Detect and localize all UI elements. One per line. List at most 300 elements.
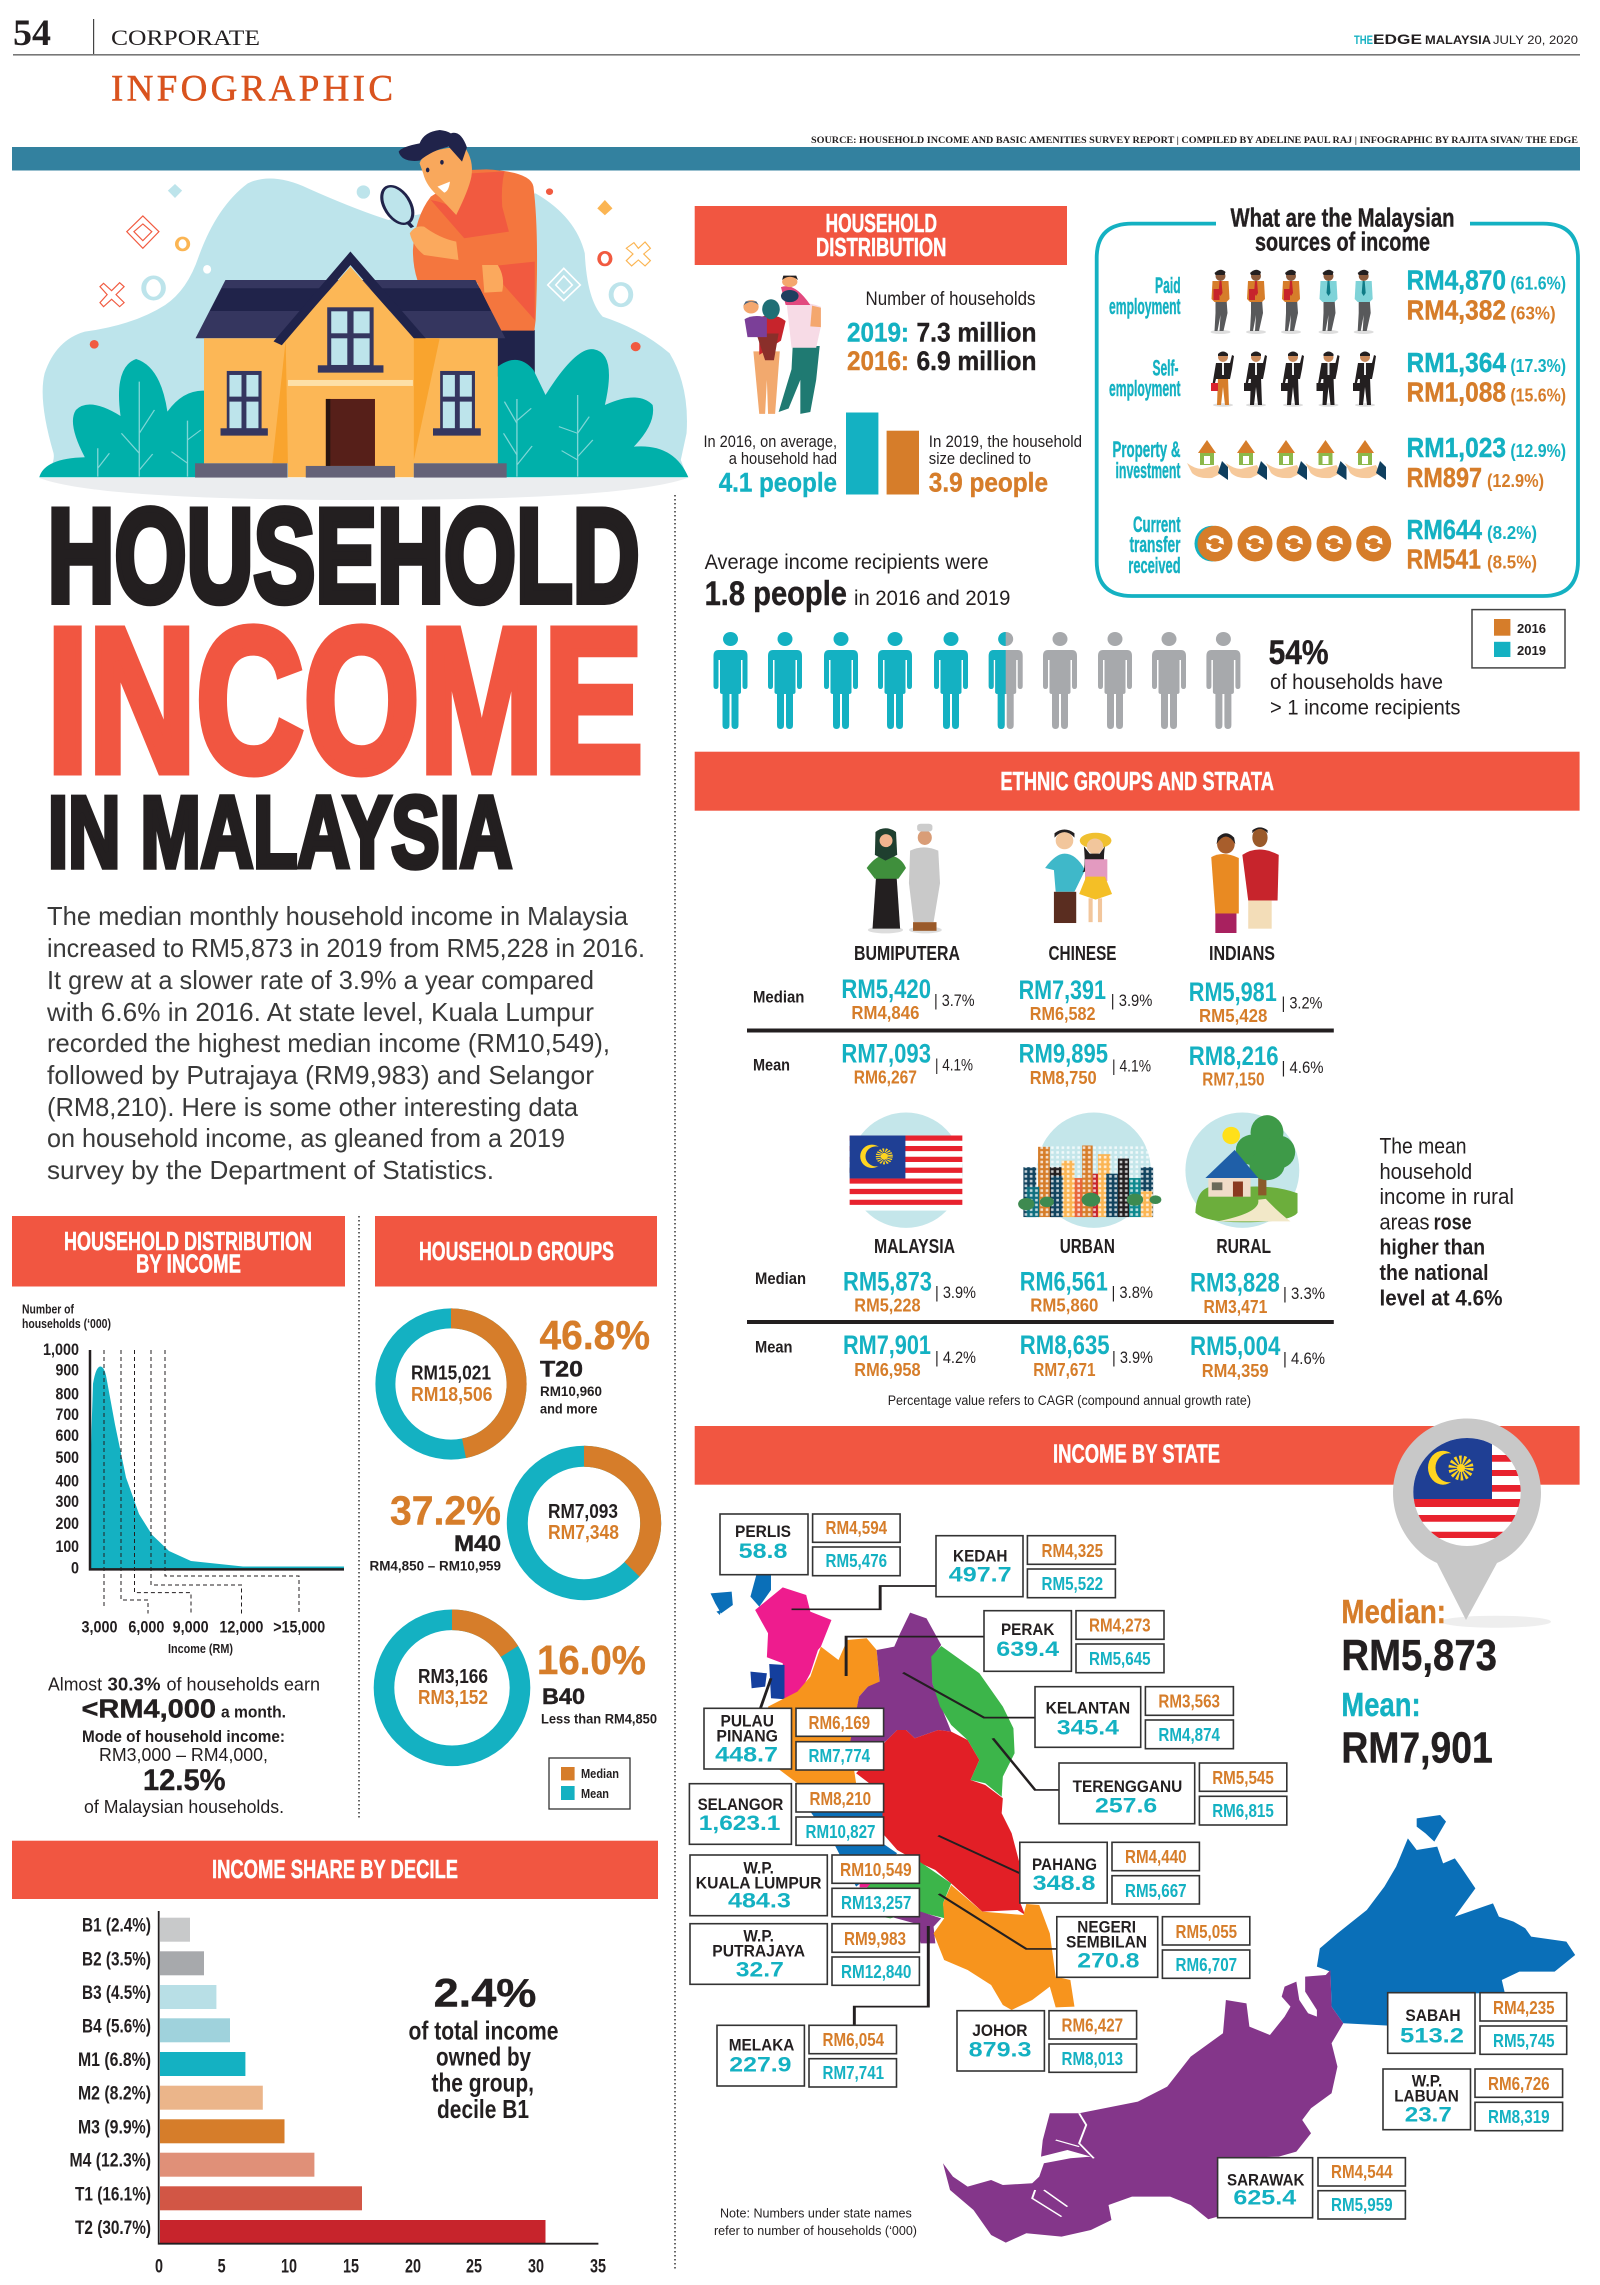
heading: INCOME BY STATE: [1053, 1439, 1220, 1469]
donut: M40: RM7,093: [548, 1501, 618, 1523]
ethnic table: | 4.1%: [935, 1055, 973, 1074]
state: Kelantan: KELANTAN: [1046, 1699, 1130, 1717]
callout text: [48, 1675, 320, 1817]
state: Melaka: 227.9: [729, 2054, 792, 2077]
donut: M40: M40: [454, 1531, 501, 1556]
donut: T20: T20: [540, 1356, 583, 1381]
state: W.P. Labuan: W.P.: [1412, 2073, 1442, 2091]
ethnic table: RM6,267: [854, 1068, 917, 1088]
bar chart: B2 (3.5%): [82, 1949, 151, 1970]
household size comparison: size declined to: [929, 449, 1031, 468]
ethnic table: | 3.2%: [1282, 993, 1322, 1012]
row: current transfer received: transfer: [1130, 532, 1181, 557]
ethnic table: RM5,428: [1199, 1006, 1267, 1026]
row: self-employment: [1109, 347, 1566, 407]
heading: ETHNIC GROUPS AND STRATA: [1000, 766, 1274, 796]
strata table: | 3.3%: [1283, 1284, 1325, 1303]
state: Johor: RM6,427: [1062, 2016, 1123, 2036]
ethnic table: RM7,150: [1202, 1070, 1264, 1090]
state: Selangor: [689, 1784, 884, 1845]
callout text: Mode of household income:: [82, 1727, 285, 1746]
distribution area chart: 900: [56, 1362, 79, 1380]
row: property and investment: RM1,023: [1406, 432, 1506, 463]
masthead: THE: [1354, 33, 1373, 47]
side note: higher than: [1380, 1235, 1485, 1260]
side note: rose: [1434, 1210, 1472, 1235]
state: Sabah: RM5,745: [1493, 2031, 1555, 2051]
donut: B40: B40: [542, 1684, 585, 1709]
bar chart: 15: [343, 2257, 359, 2278]
ethnic labels: CHINESE: [1048, 943, 1116, 965]
strata labels: MALAYSIA: [874, 1236, 955, 1258]
illustration: man inspecting house: [39, 130, 688, 500]
masthead: [1354, 32, 1578, 47]
state: Perlis: RM5,476: [826, 1551, 887, 1571]
number of households: 7.3 million: [916, 317, 1036, 347]
household size comparison: In 2016, on average,: [704, 432, 837, 451]
callout 2.4%: the group,: [432, 2068, 534, 2098]
state: Pulau Pinang: PINANG: [716, 1728, 778, 1746]
row: paid employment: employment: [1109, 294, 1181, 319]
state: Pahang: PAHANG: [1032, 1856, 1097, 1874]
legend: [1472, 610, 1565, 668]
intro paragraph: recorded the highest median income (RM10,549),: [47, 1028, 610, 1058]
ethnic labels: INDIANS: [1209, 943, 1275, 965]
callout text: of households earn: [166, 1675, 320, 1695]
national summary: Mean:: [1341, 1686, 1421, 1723]
state: W.P. Kuala Lumpur: [690, 1855, 919, 1917]
national summary: RM7,901: [1341, 1724, 1493, 1773]
intro paragraph: increased to RM5,873 in 2019 from RM5,228 in 2016.: [47, 933, 645, 963]
map note: [714, 2206, 917, 2238]
heading: [695, 752, 1580, 811]
panel: ethnic groups and strata: [695, 752, 1580, 1408]
ethnic table: | 4.6%: [1282, 1058, 1324, 1077]
distribution area chart: [43, 1341, 344, 1656]
callout 2.4%: decile B1: [437, 2094, 529, 2124]
ethnic table: Mean: [753, 1055, 790, 1074]
state: Pahang: 348.8: [1033, 1872, 1096, 1895]
heading: [12, 1216, 345, 1286]
strata table: | 4.2%: [935, 1348, 976, 1367]
pictogram: people row: [714, 632, 1240, 729]
row: property and investment: (12.9%): [1510, 441, 1566, 461]
panel: household distribution by income: [12, 1216, 345, 1817]
ethnic labels: [854, 943, 1275, 965]
state: Terengganu: RM5,545: [1212, 1768, 1274, 1788]
bar chart: [70, 1911, 606, 2278]
intro paragraph: The median monthly household income in Malaysia: [47, 901, 629, 931]
state: Sabah: [1388, 1993, 1567, 2054]
state: Terengganu: RM6,815: [1212, 1801, 1274, 1821]
section label infographic: INFOGRAPHIC: [111, 69, 393, 110]
map: Sabah and Sarawak: [943, 1815, 1575, 2243]
state: Sabah: SABAH: [1405, 2007, 1461, 2025]
state: W.P. Putrajaya: RM9,983: [844, 1929, 906, 1949]
donut: T20: RM10,960: [540, 1384, 602, 1399]
state: W.P. Putrajaya: PUTRAJAYA: [712, 1943, 805, 1961]
donut: B40: 16.0%: [537, 1637, 646, 1683]
donut: M40: RM4,850 – RM10,959: [370, 1559, 501, 1574]
row: self-employment: employment: [1109, 376, 1181, 401]
state: Pulau Pinang: 448.7: [715, 1744, 778, 1767]
distribution area chart: 400: [56, 1472, 79, 1490]
state: Perak: [984, 1611, 1164, 1673]
bar chart: 30: [528, 2257, 544, 2278]
strata table: RM5,228: [854, 1296, 921, 1316]
bar chart: 25: [466, 2257, 482, 2278]
distribution area chart: 600: [56, 1427, 79, 1445]
panel: household groups: [370, 1216, 657, 1809]
callout text: a month.: [221, 1703, 286, 1722]
section name: CORPORATE: [111, 25, 260, 50]
heading: [695, 1426, 1580, 1485]
axis title: [22, 1302, 111, 1331]
row: paid employment: RM4,870: [1406, 265, 1506, 296]
side note: the national: [1380, 1260, 1488, 1285]
state: Negeri Sembilan: RM6,707: [1176, 1955, 1237, 1975]
ethnic table: RM7,093: [841, 1039, 931, 1069]
donut: B40: [384, 1620, 657, 1756]
panel: sources of income: [1097, 202, 1578, 596]
title line 2: INCOME: [47, 586, 643, 815]
state: Johor: 879.3: [969, 2039, 1032, 2062]
legend: 2019: [1517, 643, 1546, 658]
strata table: | 4.6%: [1283, 1349, 1325, 1368]
state: Negeri Sembilan: NEGERI: [1077, 1919, 1136, 1937]
state: W.P. Putrajaya: W.P.: [743, 1928, 774, 1946]
state: Perlis: 58.8: [739, 1540, 788, 1563]
distribution area chart: Income (RM): [168, 1641, 233, 1656]
intro paragraph: with 6.6% in 2016. At state level, Kuala Lumpur: [46, 997, 594, 1027]
strata table: RM5,873: [843, 1267, 932, 1297]
axis title: Number of: [22, 1302, 75, 1316]
state: W.P. Kuala Lumpur: 484.3: [728, 1890, 791, 1913]
source line: SOURCE: HOUSEHOLD INCOME AND BASIC AMENITIES SURVEY REPORT | COMPILED BY ADELINE PAUL RAJ | INFOGRAPHIC BY RAJITA SIVAN/ THE EDGE: [811, 135, 1578, 145]
state: Sarawak: RM4,544: [1331, 2162, 1393, 2182]
heading: HOUSEHOLD GROUPS: [419, 1236, 614, 1266]
state: Pahang: RM4,440: [1125, 1847, 1187, 1867]
ethnic table: RM5,420: [841, 974, 931, 1004]
side note: areas: [1380, 1210, 1430, 1235]
row: current transfer received: RM644: [1406, 514, 1482, 545]
54% callout: > 1 income recipients: [1270, 697, 1460, 720]
state: Sabah: 513.2: [1400, 2024, 1464, 2047]
state: Kelantan: RM4,874: [1158, 1725, 1220, 1745]
intro paragraph: on household income, as gleaned from a 2019: [47, 1123, 565, 1153]
state: Melaka: RM7,741: [822, 2063, 884, 2083]
map note: refer to number of households (‘000): [714, 2223, 917, 2238]
state: Pulau Pinang: PULAU: [720, 1713, 774, 1731]
state: Pulau Pinang: [704, 1708, 884, 1770]
strata table: RM3,471: [1204, 1297, 1267, 1317]
donut: T20: 46.8%: [540, 1312, 650, 1358]
ethnic table: | 4.1%: [1112, 1057, 1151, 1076]
row: property and investment: Property &: [1112, 437, 1181, 462]
state: Kedah: RM5,522: [1042, 1574, 1103, 1594]
state: Melaka: [717, 2025, 896, 2087]
callout 2.4%: [408, 1972, 558, 2124]
heading: What are the Malaysian: [1230, 202, 1454, 232]
state: Perlis: [720, 1514, 900, 1576]
state: Kelantan: 345.4: [1057, 1716, 1119, 1739]
panel: household distribution: [695, 206, 1565, 729]
number of households: 2019:: [847, 317, 909, 347]
donut: T20: and more: [540, 1402, 598, 1416]
heading: [695, 206, 1067, 265]
row: current transfer received: [1128, 512, 1537, 578]
state: Negeri Sembilan: RM5,055: [1176, 1922, 1237, 1942]
icons: ethnic figures: [867, 824, 1279, 933]
strata table: RM6,958: [854, 1360, 921, 1380]
heading: HOUSEHOLD DISTRIBUTION: [64, 1226, 312, 1256]
donut: T20: [385, 1312, 650, 1450]
bar chart: M1 (6.8%): [78, 2050, 151, 2071]
state: Selangor: SELANGOR: [698, 1796, 783, 1814]
bar chart: 5: [218, 2257, 226, 2278]
ethnic table: [747, 974, 1334, 1090]
donut: T20: RM15,021: [411, 1363, 491, 1385]
heading: [1230, 202, 1454, 256]
average income recipients: [705, 551, 1010, 613]
state: W.P. Kuala Lumpur: W.P.: [743, 1859, 774, 1877]
row: paid employment: (61.6%): [1510, 274, 1566, 294]
side note: level at 4.6%: [1380, 1286, 1502, 1310]
title line 1: HOUSEHOLD: [48, 482, 640, 630]
bar chart: T1 (16.1%): [75, 2184, 151, 2205]
strata table: RM7,901: [843, 1330, 931, 1360]
number of households: [847, 289, 1036, 376]
panel: income share by decile: [12, 1841, 658, 2278]
legend: [549, 1758, 630, 1809]
state: W.P. Kuala Lumpur: KUALA LUMPUR: [696, 1874, 821, 1892]
page number: 54: [13, 13, 51, 54]
average income recipients: Average income recipients were: [705, 551, 989, 574]
intro paragraph: [46, 901, 645, 1185]
row: self-employment: (17.3%): [1510, 356, 1566, 376]
state: Sabah: RM4,235: [1493, 1998, 1555, 2018]
bar chart: M3 (9.9%): [78, 2117, 151, 2138]
title line 3: IN MALAYSIA: [48, 777, 512, 889]
strata table: RM4,359: [1202, 1361, 1269, 1381]
distribution area chart: >15,000: [273, 1619, 325, 1637]
state: Kedah: RM4,325: [1042, 1541, 1103, 1561]
heading: [12, 1841, 658, 1899]
legend: Mean: [581, 1786, 609, 1801]
intro paragraph: It grew at a slower rate of 3.9% a year compared: [47, 965, 594, 995]
state: W.P. Labuan: 23.7: [1405, 2104, 1452, 2127]
ethnic table: RM6,582: [1030, 1004, 1096, 1024]
bar chart: 20: [405, 2257, 421, 2278]
household size comparison: 4.1 people: [719, 467, 837, 497]
callout text: RM3,000 – RM4,000,: [99, 1745, 268, 1765]
state: Sarawak: [1218, 2158, 1405, 2219]
state: Selangor: RM10,827: [806, 1822, 876, 1842]
54% callout: [1269, 634, 1460, 720]
callout 2.4%: of total income: [408, 2015, 558, 2045]
ethnic table: RM7,391: [1019, 975, 1106, 1005]
masthead: JULY 20, 2020: [1493, 33, 1578, 47]
distribution area chart: 700: [56, 1406, 79, 1424]
state: Terengganu: TERENGGANU: [1073, 1778, 1182, 1796]
strata table: Mean: [755, 1337, 792, 1356]
strata table: [747, 1267, 1334, 1381]
bar chart: M2 (8.2%): [78, 2084, 151, 2105]
state: Negeri Sembilan: [1057, 1917, 1250, 1978]
distribution area chart: 200: [56, 1515, 79, 1533]
callout text: <RM4,000: [82, 1694, 216, 1724]
state: Kedah: 497.7: [949, 1564, 1012, 1587]
strata labels: RURAL: [1216, 1236, 1271, 1258]
number of households: 6.9 million: [916, 346, 1036, 376]
state: Negeri Sembilan: SEMBILAN: [1066, 1934, 1147, 1952]
panel: income by state: [689, 1418, 1580, 2243]
heading: BY INCOME: [136, 1249, 241, 1279]
donut: B40: RM3,152: [418, 1687, 488, 1709]
bar chart: B3 (4.5%): [82, 1983, 151, 2004]
row: paid employment: (63%): [1510, 303, 1556, 323]
heading: [375, 1216, 657, 1286]
state: Kelantan: RM3,563: [1158, 1692, 1220, 1712]
heading: DISTRIBUTION: [816, 232, 946, 262]
icons: Malaysia, urban, rural: [849, 1113, 1299, 1228]
distribution area chart: 1,000: [43, 1341, 79, 1359]
bar chart: 35: [590, 2257, 606, 2278]
heading: INCOME SHARE BY DECILE: [212, 1854, 458, 1884]
donut: M40: [370, 1456, 651, 1590]
strata table: RM7,671: [1033, 1360, 1096, 1380]
top band: [12, 147, 1580, 170]
state: Melaka: MELAKA: [729, 2037, 794, 2055]
heading: sources of income: [1255, 226, 1430, 256]
row: self-employment: Self-: [1152, 355, 1178, 380]
map: Peninsular Malaysia: [711, 1575, 1025, 1915]
ethnic labels: BUMIPUTERA: [854, 943, 960, 965]
number of households: Number of households: [866, 289, 1036, 310]
distribution area chart: 0: [71, 1560, 79, 1578]
state: W.P. Labuan: LABUAN: [1394, 2088, 1459, 2106]
bar chart: B1 (2.4%): [82, 1916, 151, 1937]
state: Perak: 639.4: [996, 1638, 1059, 1661]
state: Perlis: RM4,594: [826, 1518, 887, 1538]
row: current transfer received: (8.2%): [1487, 523, 1537, 543]
strata table: | 3.9%: [1112, 1348, 1153, 1367]
row: paid employment: RM4,382: [1406, 294, 1506, 325]
callout text: of Malaysian households.: [84, 1797, 284, 1817]
donut: T20: RM18,506: [411, 1384, 492, 1406]
state: Sarawak: SARAWAK: [1227, 2172, 1305, 2190]
strata table: RM8,635: [1020, 1330, 1110, 1360]
bar chart: 0: [155, 2257, 163, 2278]
row: paid employment: Paid: [1155, 273, 1181, 298]
distribution area chart: 3,000: [82, 1619, 118, 1637]
distribution area chart: 9,000: [173, 1619, 209, 1637]
distribution area chart: 800: [56, 1386, 79, 1404]
map pin with flag: [1393, 1418, 1551, 1628]
state: Pahang: [1020, 1842, 1199, 1904]
masthead: EDGE: [1373, 32, 1422, 47]
ethnic table: | 3.9%: [1111, 991, 1152, 1010]
bar chart: 10: [281, 2257, 297, 2278]
map note: Note: Numbers under state names: [720, 2206, 912, 2221]
callout text: 30.3%: [108, 1675, 160, 1695]
heading: HOUSEHOLD: [826, 208, 937, 238]
household size comparison: In 2019, the household: [929, 432, 1082, 451]
row: self-employment: RM1,088: [1406, 376, 1506, 407]
masthead: MALAYSIA: [1425, 33, 1491, 47]
strata table: RM5,860: [1030, 1296, 1098, 1316]
strata table: Median: [755, 1269, 806, 1288]
state: Terengganu: 257.6: [1095, 1795, 1157, 1818]
row: current transfer received: received: [1128, 553, 1181, 578]
distribution area chart: 100: [56, 1538, 79, 1556]
strata labels: [874, 1236, 1271, 1258]
state: Selangor: 1,623.1: [699, 1812, 781, 1835]
bar chart: T2 (30.7%): [75, 2218, 151, 2239]
ethnic table: RM4,846: [851, 1003, 919, 1023]
strata table: RM5,004: [1190, 1331, 1280, 1361]
state: Negeri Sembilan: 270.8: [1077, 1950, 1140, 1973]
bar chart: M4 (12.3%): [70, 2151, 151, 2172]
strata table: | 3.8%: [1112, 1283, 1153, 1302]
legend: 2016: [1517, 621, 1546, 636]
strata table: | 3.9%: [935, 1283, 976, 1302]
state: Pahang: RM5,667: [1125, 1881, 1187, 1901]
state: Perak: RM4,273: [1089, 1616, 1151, 1636]
state: Kedah: [936, 1536, 1115, 1598]
state: Johor: [957, 2011, 1137, 2072]
state: W.P. Putrajaya: [690, 1924, 919, 1985]
callout text: Almost: [48, 1675, 102, 1695]
bar chart: B4 (5.6%): [82, 2016, 151, 2037]
number of households: 2016:: [847, 346, 909, 376]
average income recipients: in 2016 and 2019: [854, 587, 1010, 610]
intro paragraph: followed by Putrajaya (RM9,983) and Selangor: [47, 1060, 594, 1090]
side note: income in rural: [1380, 1184, 1514, 1209]
row: self-employment: RM1,364: [1406, 347, 1506, 378]
row: property and investment: [1112, 432, 1566, 493]
donut: B40: Less than RM4,850: [541, 1712, 657, 1727]
side note: The mean: [1380, 1133, 1466, 1158]
ethnic table: RM8,750: [1030, 1068, 1097, 1088]
legend: Median: [581, 1766, 619, 1781]
state: W.P. Kuala Lumpur: RM13,257: [841, 1893, 911, 1913]
household size comparison: a household had: [729, 449, 837, 468]
row: self-employment: (15.6%): [1510, 385, 1566, 405]
state: W.P. Labuan: [1383, 2069, 1563, 2131]
donut: M40: RM7,348: [548, 1522, 619, 1544]
household size comparison: 3.9 people: [929, 467, 1048, 497]
distribution area chart: 12,000: [219, 1619, 263, 1637]
side note: [1380, 1133, 1514, 1310]
state: Sarawak: RM5,959: [1331, 2195, 1393, 2215]
state: Pulau Pinang: RM6,169: [808, 1713, 870, 1733]
side note: household: [1380, 1159, 1472, 1184]
household size comparison: [704, 412, 1082, 497]
callout 2.4%: owned by: [436, 2042, 531, 2072]
page header: [13, 13, 1580, 145]
state: Melaka: RM6,054: [822, 2030, 884, 2050]
ethnic table: RM5,981: [1189, 977, 1277, 1007]
state: Perlis: PERLIS: [735, 1523, 791, 1541]
distribution area chart: 500: [56, 1449, 79, 1467]
callout 2.4%: 2.4%: [434, 1972, 536, 2016]
54% callout: of households have: [1270, 671, 1443, 694]
icon: family: [743, 276, 821, 414]
54% callout: 54%: [1269, 634, 1329, 672]
footnote: Percentage value refers to CAGR (compound annual growth rate): [888, 1393, 1251, 1408]
state: Selangor: RM8,210: [810, 1789, 871, 1809]
